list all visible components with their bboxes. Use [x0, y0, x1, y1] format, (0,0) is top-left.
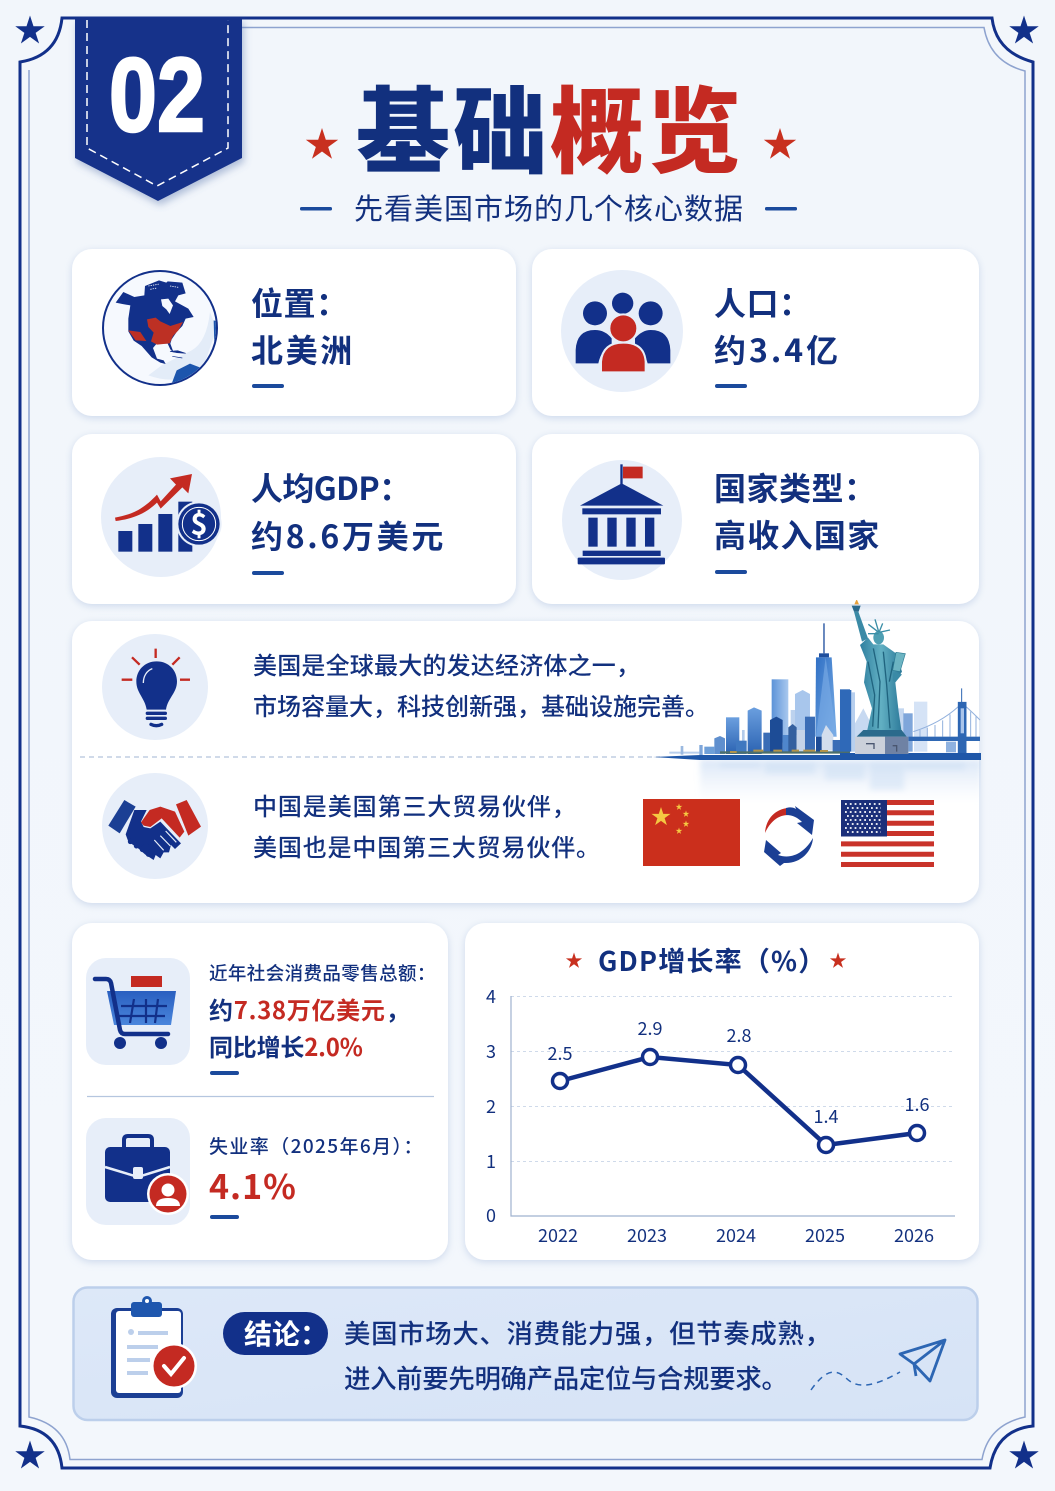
text: unemployment — [209, 1132, 424, 1219]
conclusion text — [344, 1312, 832, 1396]
icon: globe — [103, 271, 219, 386]
text: retail sales — [209, 960, 436, 1075]
panel: GDP growth chart — [465, 923, 979, 1260]
text: unemployment: 失业率（2025年6月）： — [209, 1132, 424, 1159]
icon: paper plane with dashed path — [811, 1340, 945, 1390]
text: unemployment: 4.1% — [209, 1160, 297, 1209]
text: trade — [253, 787, 601, 863]
line chart: 2.5 — [548, 1040, 573, 1066]
line chart: 2.8 — [727, 1022, 752, 1048]
text: trade: 美国也是中国第三大贸易伙伴。 — [253, 828, 601, 863]
panel: location — [72, 249, 516, 416]
text: 人均GDP： — [251, 464, 411, 510]
line chart: 2026 — [894, 1222, 934, 1248]
icon: exchange arrows — [764, 806, 814, 866]
icon: rising chart with coin: $ — [190, 502, 208, 544]
text: 约8.6万美元 — [251, 512, 446, 558]
panel: conclusion — [74, 1288, 978, 1420]
text — [251, 464, 446, 575]
conclusion badge: 结论： — [244, 1313, 328, 1353]
text — [714, 464, 881, 574]
icon: light bulb — [102, 634, 208, 740]
text — [251, 279, 355, 388]
line chart: 2025 — [805, 1222, 845, 1248]
text: economy — [253, 646, 709, 722]
panel: overview and trade — [72, 599, 982, 903]
text — [714, 279, 841, 388]
skyline: statue and bridge — [840, 599, 982, 758]
text: 位置： — [251, 279, 349, 325]
title: 基础概览 — [356, 57, 744, 193]
panel: GDP per capita — [72, 434, 516, 604]
text: 国家类型： — [714, 464, 877, 510]
line chart: 1.6 — [905, 1091, 930, 1117]
icon: clipboard with check — [111, 1296, 197, 1398]
icon: handshake — [102, 773, 208, 879]
icon: people — [561, 270, 683, 392]
text: retail sales: 约7.38万亿美元， — [209, 991, 410, 1026]
text: 约3.4亿 — [714, 326, 841, 372]
icon: government building — [562, 460, 682, 580]
line chart: 1 — [486, 1148, 496, 1174]
panel: population — [532, 249, 979, 416]
text: retail sales: 近年社会消费品零售总额： — [209, 960, 436, 986]
line chart: 2 — [486, 1093, 496, 1119]
icon: briefcase with person — [86, 1118, 190, 1225]
flag: USA — [841, 800, 934, 867]
text: 北美洲 — [251, 326, 355, 372]
text: economy: 美国是全球最大的发达经济体之一， — [253, 646, 640, 681]
illustration: New York skyline and Statue of Liberty — [653, 599, 982, 804]
line chart — [486, 983, 955, 1248]
conclusion text: 进入前要先明确产品定位与合规要求。 — [344, 1357, 788, 1396]
line chart: 2024 — [716, 1222, 756, 1248]
section number badge: 02 — [109, 37, 205, 154]
text: 高收入国家 — [714, 511, 881, 557]
line chart: 2.9 — [638, 1015, 663, 1041]
text: 人口： — [714, 279, 812, 325]
island base — [653, 755, 981, 760]
line chart: 0 — [486, 1202, 496, 1228]
skyline: towers — [669, 623, 850, 755]
flag: China — [643, 799, 740, 866]
panel: consumption and unemployment — [72, 923, 448, 1260]
line chart: 1.4 — [814, 1103, 839, 1129]
section number badge — [75, 18, 242, 201]
line chart: 4 — [486, 983, 496, 1009]
icon: shopping cart — [86, 958, 190, 1065]
chart title: GDP增长率（%） — [598, 940, 826, 979]
line chart: 2022 — [538, 1222, 578, 1248]
icon: rising chart with coin — [101, 457, 222, 577]
text: retail sales: 同比增长2.0% — [209, 1028, 363, 1063]
line chart: 2023 — [627, 1222, 667, 1248]
conclusion text: 美国市场大、消费能力强，但节奏成熟， — [344, 1312, 832, 1351]
text: trade: 中国是美国第三大贸易伙伴， — [253, 787, 577, 822]
subtitle: 先看美国市场的几个核心数据 — [354, 186, 744, 228]
text: economy: 市场容量大，科技创新强，基础设施完善。 — [253, 687, 709, 722]
panel: country type — [532, 434, 979, 604]
line chart: 3 — [486, 1038, 496, 1064]
